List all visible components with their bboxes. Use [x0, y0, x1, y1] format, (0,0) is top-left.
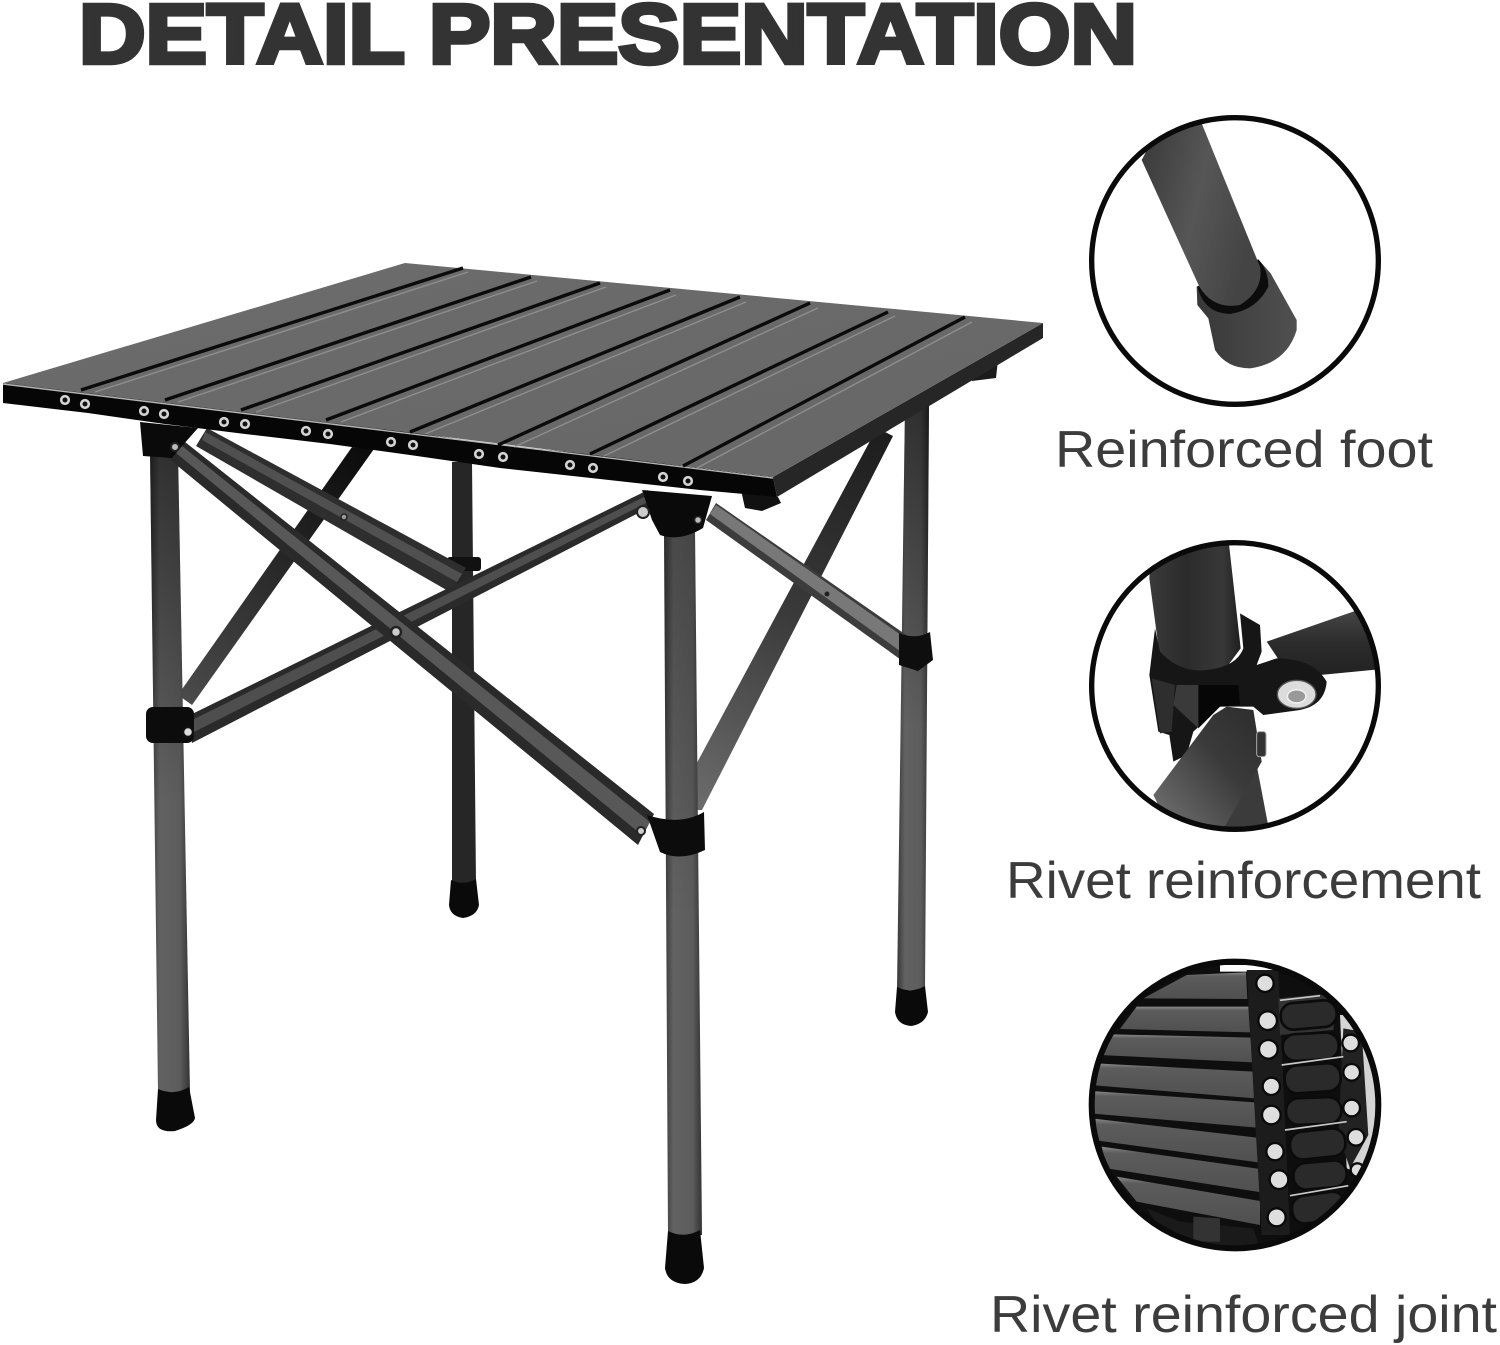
- tabletop: [3, 263, 1043, 511]
- illustration: folding table: [3, 263, 1043, 1284]
- edge rivets: [61, 396, 692, 485]
- brace: rear left: [178, 447, 374, 705]
- connector: right leg clamp: [899, 632, 933, 671]
- label: rivet reinforced joint: Rivet reinforced joint: [990, 1286, 1498, 1344]
- detail circle: rivet reinforced joint: [1080, 955, 1397, 1255]
- brace: upper falling bar: [196, 428, 466, 592]
- oval slots: [1280, 999, 1348, 1225]
- folded slats: [1143, 972, 1247, 999]
- brace: long rising bar: [188, 490, 652, 743]
- brace: short front right bar: [706, 503, 928, 672]
- table leg: front: [647, 530, 705, 1284]
- screws: [1256, 975, 1364, 1226]
- clamp: [1149, 613, 1327, 762]
- slat grooves: [81, 268, 965, 466]
- underside lip: [741, 490, 781, 511]
- detail circle: reinforced foot: [1092, 118, 1378, 404]
- slat highlights: [3, 272, 972, 478]
- brace: rear right: [692, 428, 893, 810]
- connector: left top bracket: [140, 422, 198, 458]
- bolt: [1277, 680, 1316, 708]
- slat surface: [3, 263, 1043, 477]
- hinge strip: [1247, 970, 1290, 1235]
- table leg: back right: [895, 405, 929, 1026]
- label: rivet reinforcement: Rivet reinforcement: [1006, 852, 1482, 910]
- slot separators: [1280, 996, 1348, 1196]
- side arm tube: [1266, 611, 1375, 675]
- lower diagonal tube: [1153, 707, 1262, 835]
- table leg: back left: [447, 462, 481, 918]
- rear lower tube: [1224, 769, 1268, 827]
- brace: long falling bar: [168, 438, 654, 845]
- detail circle: rivet reinforcement: [1092, 538, 1390, 835]
- side edge: [773, 323, 1043, 497]
- connector: front top bracket: [637, 490, 712, 537]
- front edge: [3, 383, 777, 497]
- label: reinforced foot: Reinforced foot: [1055, 421, 1434, 479]
- upper vertical tube: [1149, 538, 1241, 672]
- table leg: front left: [146, 452, 195, 1131]
- rivet on lower left clamp: [183, 727, 193, 737]
